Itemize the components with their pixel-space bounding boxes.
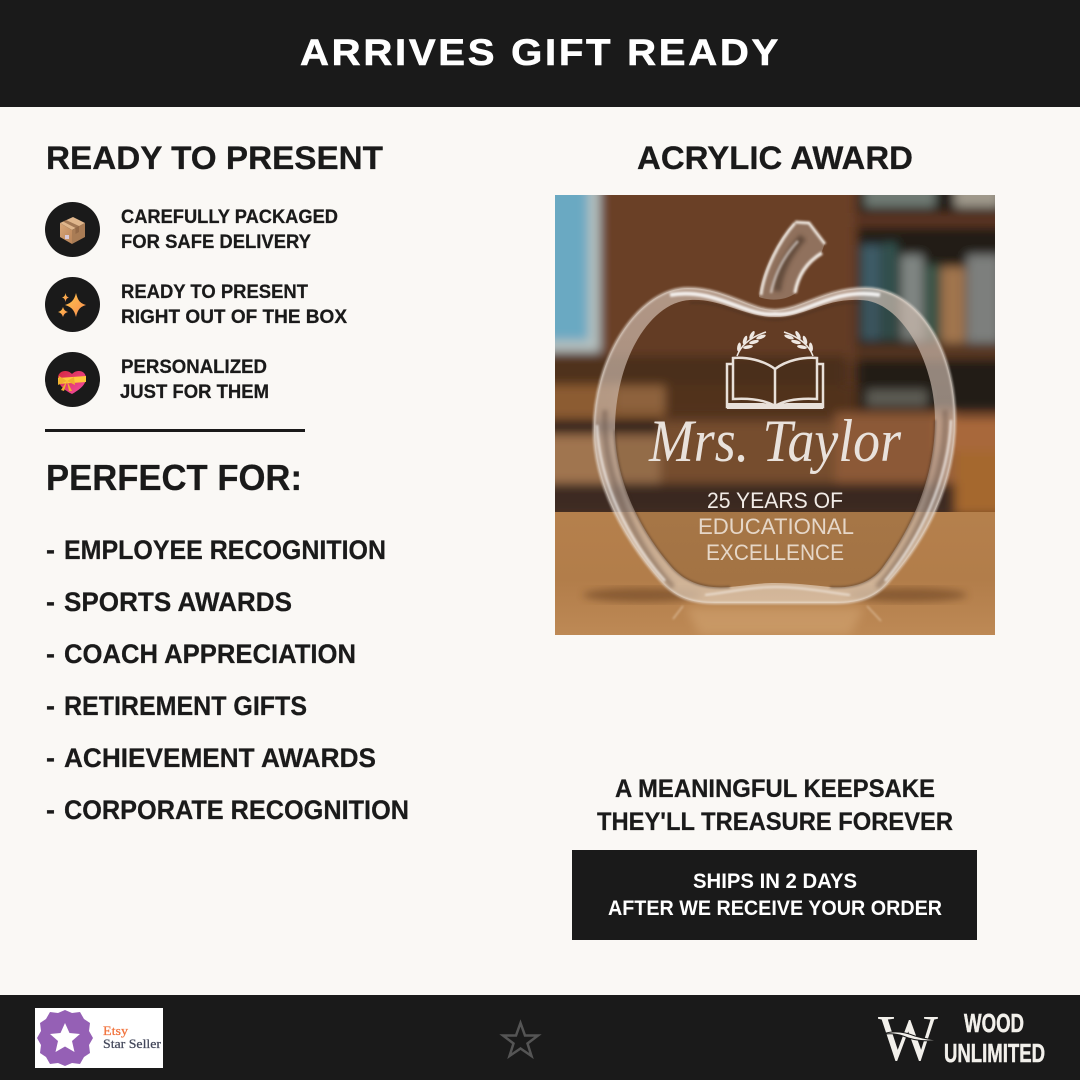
etsy star seller badge: Star Seller xyxy=(103,1036,162,1051)
engraving: open book xyxy=(727,358,823,409)
header band with title: ARRIVES GIFT READY xyxy=(300,32,781,73)
wood unlimited logo xyxy=(878,1002,1045,1075)
keepsake message xyxy=(597,775,953,836)
engraving: tribute lines: EDUCATIONAL xyxy=(698,514,854,539)
list: perfect for uses: - xyxy=(46,691,55,721)
feature: carefully packaged: CAREFULLY PACKAGED xyxy=(121,207,338,228)
heading: acrylic award: ACRYLIC AWARD xyxy=(637,140,913,176)
logo mark: W: W xyxy=(878,1002,939,1075)
engraving: recipient name: Mrs. Taylor xyxy=(648,408,902,474)
wood unlimited logo: WOOD xyxy=(964,1008,1024,1038)
list: perfect for uses: COACH APPRECIATION xyxy=(64,639,356,669)
etsy star seller badge xyxy=(35,1008,163,1068)
list: perfect for uses: - xyxy=(46,743,55,773)
feature: ready to present: READY TO PRESENT xyxy=(121,282,308,303)
engraving: tribute lines: 25 YEARS OF xyxy=(707,488,843,513)
table shadow and reflection xyxy=(583,588,967,635)
icon: gift heart xyxy=(58,371,86,394)
feature: ready to present xyxy=(45,277,347,332)
product photo: acrylic apple award xyxy=(540,180,1010,635)
engraving: tribute lines: EXCELLENCE xyxy=(706,540,844,565)
shipping callout xyxy=(572,850,977,940)
keepsake message: A MEANINGFUL KEEPSAKE xyxy=(615,775,935,803)
list: perfect for uses: - xyxy=(46,587,55,617)
list: perfect for uses: - xyxy=(46,535,55,565)
apple stem xyxy=(759,222,825,300)
list: perfect for uses: - xyxy=(46,639,55,669)
etsy star seller badge: Etsy xyxy=(103,1023,129,1038)
heading: perfect for: PERFECT FOR: xyxy=(46,457,302,498)
list: perfect for uses: CORPORATE RECOGNITION xyxy=(64,795,409,825)
feature: carefully packaged: FOR SAFE DELIVERY xyxy=(121,232,311,253)
icon: sparkles xyxy=(58,293,86,317)
engraving: tribute lines xyxy=(700,492,854,560)
icon: outline star xyxy=(503,1023,538,1056)
wooden table xyxy=(555,512,995,635)
list: perfect for uses: EMPLOYEE RECOGNITION xyxy=(64,535,386,565)
classroom background xyxy=(555,195,995,512)
heading: ready to present: READY TO PRESENT xyxy=(46,140,383,176)
list: perfect for uses: ACHIEVEMENT AWARDS xyxy=(64,743,376,773)
list: perfect for uses: RETIREMENT GIFTS xyxy=(64,691,307,721)
engraving: laurels xyxy=(736,330,814,356)
header band with title xyxy=(0,0,1080,107)
apple glass body xyxy=(594,288,955,603)
list: perfect for uses: - xyxy=(46,795,55,825)
feature: personalized: JUST FOR THEM xyxy=(120,382,269,403)
icon: package box xyxy=(60,217,85,244)
footer band xyxy=(0,995,1080,1080)
shipping callout: SHIPS IN 2 DAYS xyxy=(693,870,857,893)
shipping callout: AFTER WE RECEIVE YOUR ORDER xyxy=(608,897,942,920)
feature: carefully packaged xyxy=(45,202,338,257)
feature: personalized xyxy=(45,352,269,407)
feature list xyxy=(45,202,347,407)
list: perfect for uses: SPORTS AWARDS xyxy=(64,587,292,617)
feature: personalized: PERSONALIZED xyxy=(121,357,267,378)
list: perfect for uses xyxy=(46,535,409,825)
keepsake message: THEY'LL TREASURE FOREVER xyxy=(597,808,953,836)
feature: ready to present: RIGHT OUT OF THE BOX xyxy=(121,307,347,328)
